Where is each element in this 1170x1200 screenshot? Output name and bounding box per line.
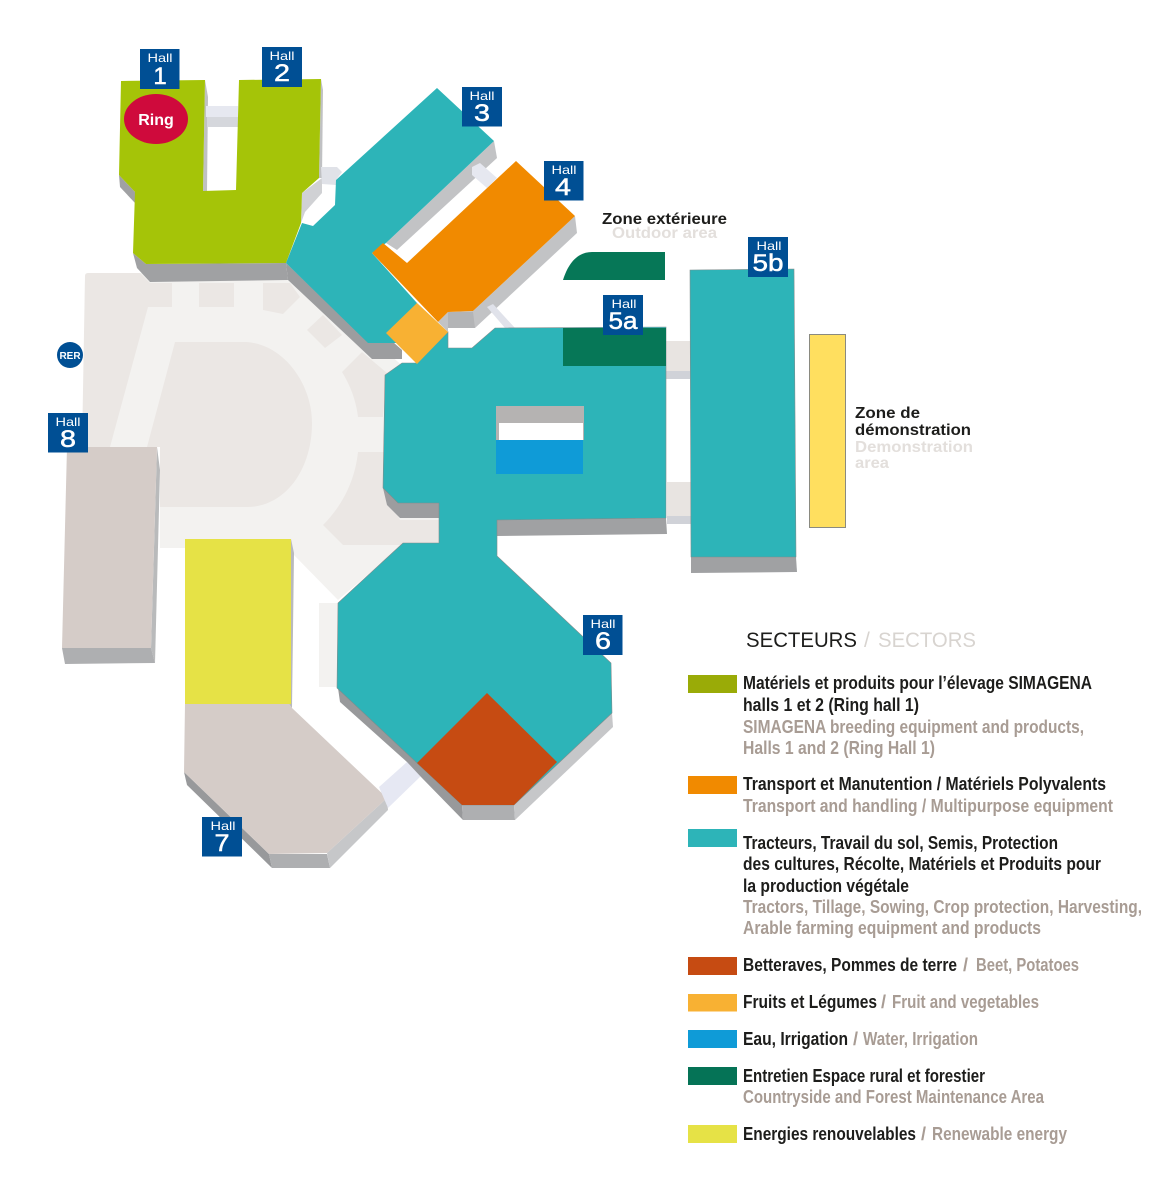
hall 8 building bbox=[62, 447, 160, 664]
hall 5a label: 5a bbox=[608, 308, 638, 335]
ring: Ring bbox=[138, 112, 174, 129]
legend: breeding equipment: halls 1 et 2 (Ring hall 1) bbox=[743, 695, 919, 715]
hall 3 label: Hall bbox=[470, 89, 494, 103]
hall 7 label: Hall bbox=[210, 819, 236, 833]
legend: beet and potatoes bbox=[688, 955, 1079, 975]
bridge hall 3 to hall 4 bbox=[472, 163, 497, 188]
legend: water and irrigation: Eau, Irrigation bbox=[743, 1029, 848, 1049]
renewable energy area bbox=[185, 539, 291, 704]
hall 1 label bbox=[140, 49, 180, 90]
ring bbox=[124, 94, 188, 144]
bridge hall 7 to hall 6 bbox=[379, 762, 422, 808]
legend: beet and potatoes: / bbox=[963, 955, 968, 975]
hall 1 label: 1 bbox=[153, 63, 167, 90]
plaza background bbox=[82, 273, 440, 687]
RER station marker: RER bbox=[59, 351, 81, 362]
legend: water and irrigation: / bbox=[853, 1029, 858, 1049]
bridge hall 4 to hall 5a bbox=[487, 304, 515, 328]
hall 4 building bbox=[372, 161, 577, 332]
bridge hall 1 to hall 2 bbox=[206, 106, 238, 127]
hall 1 and 2 building bbox=[119, 79, 323, 282]
legend: transport and handling: Transport and handling / Multipurpose equipment bbox=[743, 796, 1113, 816]
demonstration zone label: démonstration bbox=[855, 422, 971, 439]
hall 4 label bbox=[544, 161, 584, 201]
legend: fruit and vegetables: Fruits et Légumes bbox=[743, 992, 877, 1012]
hall 8 label bbox=[48, 413, 88, 453]
legend: beet and potatoes: Betteraves, Pommes de terre bbox=[743, 955, 957, 975]
connectors hall 5a to hall 5b bbox=[666, 341, 691, 524]
beet and potato area bbox=[417, 693, 557, 805]
legend heading bbox=[746, 629, 976, 652]
hall 2 label: Hall bbox=[270, 49, 294, 63]
legend: renewable energy: Energies renouvelables bbox=[743, 1124, 916, 1144]
legend: tractors and arable farming: Tracteurs, Travail du sol, Semis, Protection bbox=[743, 833, 1058, 853]
hall 8 label: 8 bbox=[60, 426, 76, 453]
legend: water and irrigation: Water, Irrigation bbox=[863, 1029, 978, 1049]
demonstration zone label: Zone de bbox=[855, 405, 920, 422]
legend: countryside and forest: Entretien Espace rural et forestier bbox=[743, 1066, 985, 1086]
water and irrigation area bbox=[496, 406, 584, 474]
hall 2 label: 2 bbox=[274, 60, 290, 87]
hall 4 label: 4 bbox=[555, 174, 571, 201]
demonstration zone label: area bbox=[855, 455, 889, 472]
hall 5a label bbox=[603, 295, 643, 335]
countryside area hall 5a bbox=[563, 328, 666, 366]
outdoor area shape bbox=[563, 252, 665, 280]
hall 5a and 6 building bbox=[337, 327, 667, 820]
legend: fruit and vegetables: / bbox=[881, 992, 886, 1012]
RER station marker bbox=[57, 342, 83, 368]
outdoor zone label bbox=[602, 211, 727, 242]
outdoor zone label: Zone extérieure bbox=[602, 211, 727, 228]
hall 7 building with renewable energy area bbox=[184, 539, 388, 868]
legend: breeding equipment bbox=[688, 673, 1092, 758]
legend: beet and potatoes: Beet, Potatoes bbox=[976, 955, 1079, 975]
hall 4 label: Hall bbox=[552, 163, 576, 177]
legend: fruit and vegetables bbox=[688, 992, 1039, 1012]
legend: breeding equipment: Halls 1 and 2 (Ring Hall 1) bbox=[743, 738, 935, 758]
legend heading: SECTORS bbox=[878, 629, 976, 652]
demonstration area bbox=[810, 334, 846, 528]
fruit and vegetables area bbox=[386, 303, 448, 364]
hall 7 label bbox=[202, 817, 242, 857]
legend heading: / bbox=[864, 629, 870, 652]
hall 5b building bbox=[690, 269, 797, 573]
hall 6 label: 6 bbox=[595, 628, 611, 655]
legend: countryside and forest bbox=[688, 1066, 1045, 1107]
outdoor zone label: Outdoor area bbox=[612, 225, 717, 242]
bridge hall 2 to hall 3 bbox=[321, 167, 342, 185]
legend: breeding equipment: SIMAGENA breeding equipment and products, bbox=[743, 717, 1084, 737]
demonstration zone label bbox=[855, 405, 973, 472]
legend: transport and handling: Transport et Manutention / Matériels Polyvalents bbox=[743, 774, 1106, 794]
legend: tractors and arable farming: Arable farming equipment and products bbox=[743, 918, 1041, 938]
hall 5a label: Hall bbox=[612, 297, 636, 311]
legend heading: SECTEURS bbox=[746, 629, 857, 652]
legend: tractors and arable farming bbox=[688, 829, 1142, 938]
hall 6 label bbox=[583, 615, 622, 655]
hall 8 label: Hall bbox=[56, 415, 80, 429]
legend: tractors and arable farming: la production végétale bbox=[743, 876, 909, 896]
hall 6 label: Hall bbox=[590, 617, 616, 631]
hall 5b label: Hall bbox=[756, 239, 782, 253]
hall 3 building bbox=[286, 88, 497, 359]
hall 7 label: 7 bbox=[214, 830, 230, 857]
hall 5b label: 5b bbox=[752, 250, 784, 277]
legend: renewable energy bbox=[688, 1124, 1067, 1144]
legend: countryside and forest: Countryside and Forest Maintenance Area bbox=[743, 1087, 1045, 1107]
legend: water and irrigation bbox=[688, 1029, 978, 1049]
legend: breeding equipment: Matériels et produits pour l’élevage SIMAGENA bbox=[743, 673, 1092, 693]
hall 3 label bbox=[462, 87, 502, 127]
hall 1 label: Hall bbox=[148, 51, 172, 65]
hall 2 label bbox=[262, 47, 302, 87]
hall 5b label bbox=[748, 237, 788, 277]
legend: transport and handling bbox=[688, 774, 1113, 816]
demonstration zone label: Demonstration bbox=[855, 439, 973, 456]
legend: fruit and vegetables: Fruit and vegetables bbox=[892, 992, 1039, 1012]
legend: renewable energy: / bbox=[921, 1124, 926, 1144]
legend: tractors and arable farming: des cultures, Récolte, Matériels et Produits pour bbox=[743, 854, 1101, 874]
legend: renewable energy: Renewable energy bbox=[932, 1124, 1067, 1144]
hall 3 label: 3 bbox=[474, 100, 490, 127]
